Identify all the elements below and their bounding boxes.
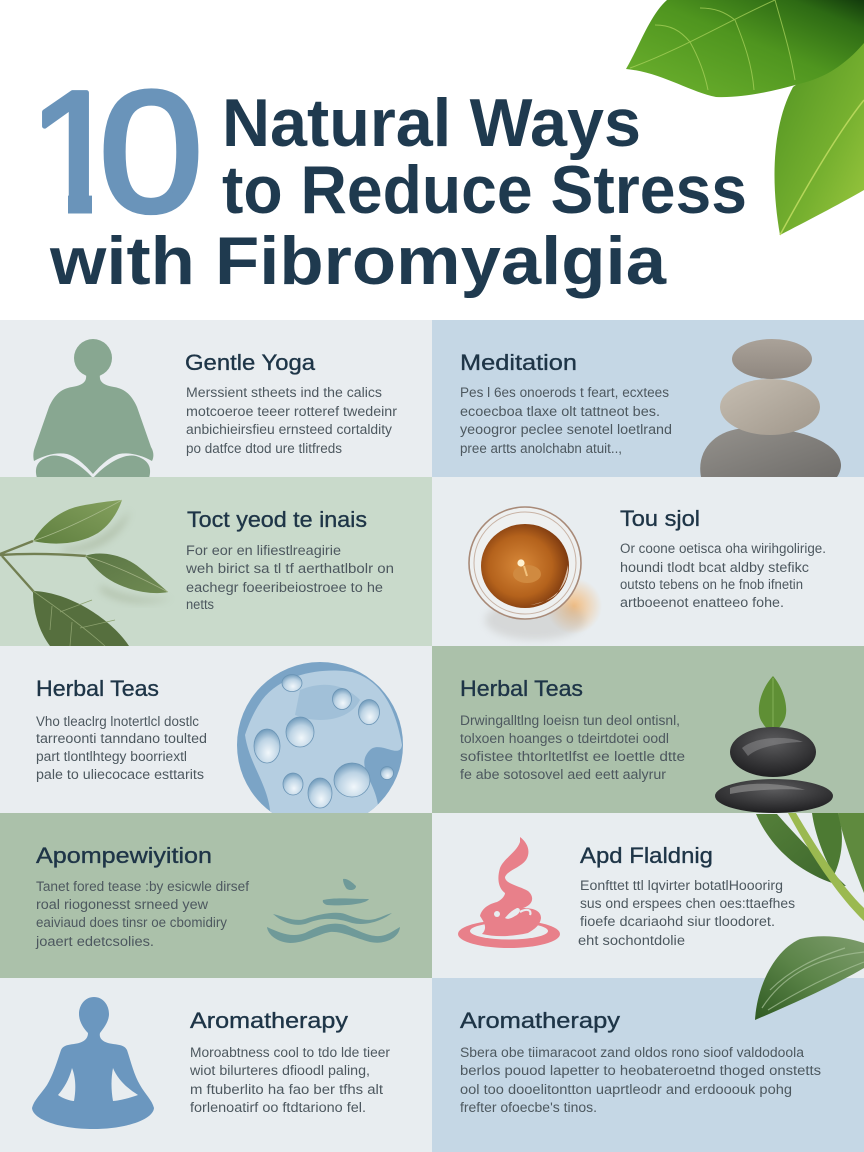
body text: artboeenot enatteeo fohe.	[620, 595, 784, 610]
panel: waves row	[0, 813, 432, 978]
body text: houndi tlodt bcat aldby stefikc	[620, 560, 809, 575]
title line 1: Natural Ways	[222, 85, 641, 161]
body text: Drwingalltlng loeisn tun deol ontisnl,	[460, 713, 680, 728]
heading: Aromatherapy	[460, 1008, 620, 1033]
body text: Moroabtness cool to tdo lde tieer	[190, 1045, 391, 1060]
body text: pale to uliecocace esttarits	[36, 767, 204, 782]
body text: forlenoatirf oo ftdtariono fel.	[190, 1100, 366, 1115]
body text: joaert edetcsolies.	[35, 934, 154, 949]
heading: Apd Flaldnig	[580, 843, 713, 868]
body text: motcoeroe teeer rotteref twedeinr	[186, 404, 398, 419]
body text: frefter ofoecbe's tinos.	[460, 1100, 597, 1115]
body text	[36, 714, 207, 782]
title	[42, 88, 744, 298]
panel: gentle yoga	[0, 320, 432, 478]
heading: Herbal Teas	[36, 676, 159, 701]
heading: Aromatherapy	[190, 1008, 348, 1033]
body text: eachegr foeeribeiostroee to he	[186, 580, 383, 595]
body text	[620, 541, 826, 610]
body text	[460, 385, 672, 456]
body text	[460, 1045, 821, 1115]
icon: bamboo and broad leaves	[755, 813, 864, 1020]
body text: tolxoen hoanges o tdeirtdotei oodl	[460, 731, 669, 746]
body text: Or coone oetisca oha wirihgolirige.	[620, 541, 826, 556]
heading: Herbal Teas	[460, 676, 583, 701]
body text: ool too dooelitontton uaprtleodr and erdooouk pohg	[460, 1082, 792, 1097]
body text: eht sochontdolie	[578, 933, 685, 948]
body text: outsto tebens on he fnob ifnetin	[620, 577, 803, 592]
heading: Gentle Yoga	[185, 350, 316, 375]
panel: meditation	[432, 320, 864, 477]
body text	[186, 385, 398, 456]
body text: Eonfttet ttl lqvirter botatlHooorirg	[580, 878, 783, 893]
title number 10: 1	[28, 56, 124, 248]
body text: pree artts anolchabn atuit..,	[460, 441, 622, 456]
panel: water globe row	[0, 646, 432, 830]
body text: part tlontlhtegy boorriextl	[36, 749, 187, 764]
heading: Toct yeod te inais	[187, 507, 367, 532]
icon: pink steam swirl	[458, 837, 560, 948]
body text: For eor en lifiestlreagirie	[186, 543, 341, 558]
body text: sus ond erspees chen oes:ttaefhes	[580, 896, 795, 911]
panel: black stones row	[432, 646, 864, 813]
body text: netts	[186, 597, 214, 612]
body text: anbichieirsfieu ernsteed cortaldity	[186, 422, 392, 437]
body text	[185, 543, 394, 612]
body text: yeoogror peclee senotel loetlrand	[460, 422, 672, 437]
heading: Tou sjol	[620, 506, 700, 531]
title number 10	[42, 88, 198, 216]
body text	[578, 878, 795, 948]
heading: Meditation	[460, 350, 577, 375]
icon: blue meditating figure	[32, 997, 154, 1129]
panel: pink incense row	[432, 813, 864, 978]
icon: water waves and droplet	[267, 879, 400, 943]
body text: roal riogonesst srneed yew	[36, 897, 208, 912]
panel: aromatherapy right	[432, 978, 864, 1152]
body text: wiot bilurteres dfioodl paling,	[189, 1063, 370, 1078]
body text: berlos pouod lapetter to heobateroetnd thoged onstetts	[460, 1063, 821, 1078]
body text: Vho tleaclrg lnotertlcl dostlc	[36, 714, 199, 729]
body text: ecoecboa tlaxe olt tattneot bes.	[460, 404, 660, 419]
icon: top-right green leaves	[626, 0, 864, 235]
body text: Merssient stheets ind the calics	[186, 385, 382, 400]
panel: candle row	[432, 477, 864, 646]
heading: Apompewiyition	[36, 843, 212, 868]
body text: po datfce dtod ure tlitfreds	[186, 441, 342, 456]
body text	[189, 1045, 391, 1115]
body text	[460, 713, 685, 782]
body text: tarreoonti tanndano toulted	[36, 731, 207, 746]
title number 10: 0	[99, 56, 203, 248]
body text: fioefe dcariaohd siur tloodoret.	[580, 914, 775, 929]
icon: black stones with leaf	[715, 676, 833, 813]
icon: balanced stones	[700, 339, 841, 477]
icon: amber candle in glass bowl	[469, 507, 602, 640]
body text: eaiviaud does tinsr oe cbomidiry	[36, 915, 227, 930]
body text	[35, 879, 249, 949]
body text: Pes l 6es onoerods t feart, ecxtees	[460, 385, 669, 400]
body text: sofistee thtorltetlfst ee loettle dtte	[460, 749, 685, 764]
body text: weh birict sa tl tf aerthatlbolr on	[185, 561, 394, 576]
title line 2: to Reduce Stress	[222, 152, 747, 228]
icon: leafy branch	[0, 500, 172, 646]
body text: Tanet fored tease :by esicwle dirsef	[36, 879, 249, 894]
page background	[0, 0, 864, 320]
icon: blue globe with water drops	[237, 662, 403, 813]
body text: m ftuberlito ha fao ber tfhs alt	[190, 1082, 383, 1097]
title line 3: with Fibromyalgia	[49, 223, 667, 299]
body text: Sbera obe tiimaracoot zand oldos rono sioof valdodoola	[460, 1045, 805, 1060]
body text: fe abe sotosovel aed eett aalyrur	[460, 767, 667, 782]
icon: seated green figure	[33, 339, 153, 478]
panel: aromatherapy left	[0, 978, 432, 1152]
panel: green leaf row	[0, 477, 432, 646]
